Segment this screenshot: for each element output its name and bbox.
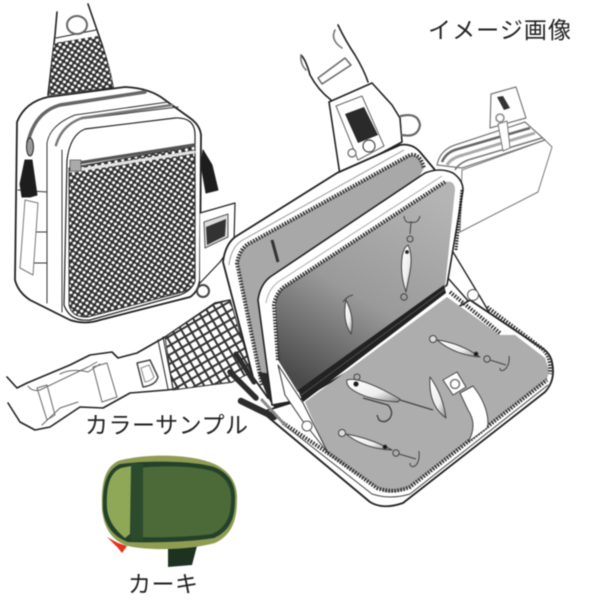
floor panel — [262, 292, 553, 506]
lure: small spoon on panel — [343, 295, 353, 334]
D-ring — [137, 360, 158, 387]
tab strap — [498, 121, 510, 151]
olive outer shell — [102, 456, 237, 549]
backpack body — [15, 87, 201, 322]
dark outline — [103, 462, 235, 542]
waist strap with buckle and mesh — [7, 300, 252, 430]
lure: floor upper right — [430, 336, 509, 371]
side strap with label — [200, 203, 235, 283]
side gusset lines — [18, 102, 178, 312]
back panel — [223, 145, 435, 400]
top zipper — [28, 92, 145, 142]
D-ring — [197, 285, 209, 297]
lure: vertical on panel — [401, 216, 420, 300]
right strap eyelet — [468, 290, 478, 300]
strap mesh — [165, 300, 252, 390]
buckle details — [28, 362, 97, 425]
light left panel — [107, 466, 131, 538]
buckle slider — [318, 58, 351, 84]
strap outline — [7, 300, 250, 430]
khaki colour sample pouch — [102, 456, 237, 567]
upper shoulder strap of open pouch — [301, 25, 420, 175]
central zipper — [298, 285, 446, 402]
right zipper pull — [201, 150, 218, 193]
caption: khaki: カーキ — [128, 571, 198, 597]
side tag — [20, 200, 38, 275]
strap end piece with label — [329, 83, 402, 175]
title: image label: イメージ画像 — [428, 17, 571, 43]
D-ring — [401, 115, 420, 136]
pouch layered edges — [442, 128, 530, 162]
front pocket panel — [64, 118, 195, 320]
front panel — [258, 170, 463, 405]
lure: floor with hook and spinner — [347, 374, 446, 422]
neck strap with mesh — [48, 4, 113, 95]
red zipper tag — [107, 537, 127, 553]
left zipper pull — [20, 160, 37, 197]
dark corner at zipper junction — [258, 372, 300, 424]
pocket zipper — [72, 145, 194, 164]
lure: floor lower — [338, 430, 419, 467]
mesh pocket — [69, 146, 195, 317]
hanging tab — [490, 87, 526, 128]
strap webbing — [301, 25, 368, 100]
open pouch — [223, 145, 553, 506]
tab — [168, 546, 197, 567]
right strap — [447, 247, 505, 340]
backpack illustration — [15, 4, 235, 322]
caption: color sample: カラーサンプル — [85, 412, 248, 438]
dark zipper strip — [131, 463, 143, 540]
closed second pouch in background — [437, 87, 552, 232]
zipper pulls — [230, 354, 285, 425]
mesh panel — [136, 466, 231, 537]
left floor strap — [278, 365, 328, 453]
floor strap with eyelet — [443, 372, 488, 442]
